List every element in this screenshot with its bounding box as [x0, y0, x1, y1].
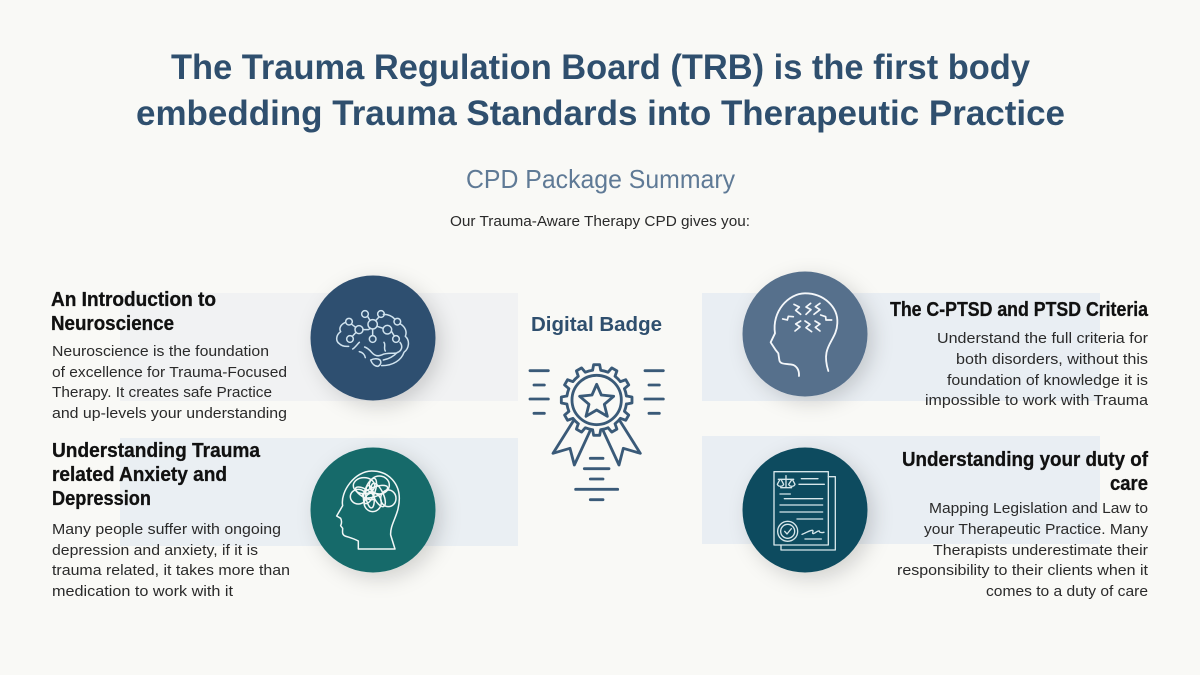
text block: both disorders, without this [956, 351, 1148, 368]
text block [52, 521, 290, 600]
icon: legal document [742, 448, 868, 572]
panel: digital badge [530, 314, 663, 500]
icon: head with tangled thoughts [310, 448, 436, 572]
panel: anxiety and depression [52, 438, 518, 600]
band [702, 293, 1100, 401]
subtitle: CPD Package Summary [466, 164, 735, 194]
text block: Many people suffer with ongoing [52, 521, 281, 538]
text block: of excellence for Trauma-Focused [52, 364, 287, 381]
text block: responsibility to their clients when it [897, 562, 1149, 579]
text block [52, 343, 287, 422]
text block: and up-levels your understanding [52, 405, 287, 422]
text block: Understand the full criteria for [937, 330, 1148, 347]
icon: brain network [310, 276, 436, 400]
text block: trauma related, it takes more than [52, 562, 290, 579]
heading [52, 440, 261, 510]
title [136, 48, 1065, 133]
heading: The C-PTSD and PTSD Criteria [890, 299, 1149, 321]
intro line: Our Trauma-Aware Therapy CPD gives you: [450, 213, 750, 230]
heading: related Anxiety and [52, 464, 227, 486]
band [702, 436, 1100, 544]
text block: foundation of knowledge it is [947, 372, 1148, 389]
heading: care [1110, 473, 1148, 495]
text block: depression and anxiety, if it is [52, 542, 258, 559]
title: The Trauma Regulation Board (TRB) is the first body [171, 48, 1031, 87]
icon: head with stress signals [742, 272, 868, 396]
panel: C-PTSD and PTSD criteria [702, 272, 1149, 409]
heading [51, 289, 216, 335]
band [120, 438, 518, 546]
heading: Understanding your duty of [902, 449, 1148, 471]
text block: Therapy. It creates safe Practice [52, 384, 272, 401]
heading [902, 449, 1148, 495]
text block: your Therapeutic Practice. Many [924, 521, 1149, 538]
text block: comes to a duty of care [986, 583, 1148, 600]
text block [897, 500, 1149, 600]
band [120, 293, 518, 401]
heading: An Introduction to [51, 289, 216, 311]
text block: medication to work with it [52, 583, 234, 600]
text block: impossible to work with Trauma [925, 392, 1149, 409]
panel: neuroscience [51, 276, 518, 422]
heading: Understanding Trauma [52, 440, 261, 462]
heading: Neuroscience [51, 313, 174, 335]
text block: Mapping Legislation and Law to [929, 500, 1148, 517]
icon: award badge [530, 365, 663, 500]
panel: duty of care [702, 436, 1149, 600]
text block: Therapists underestimate their [933, 542, 1148, 559]
text block: Neuroscience is the foundation [52, 343, 269, 360]
heading: Depression [52, 488, 151, 510]
heading: Digital Badge [531, 314, 662, 336]
text block [925, 330, 1149, 409]
title: embedding Trauma Standards into Therapeutic Practice [136, 94, 1065, 133]
